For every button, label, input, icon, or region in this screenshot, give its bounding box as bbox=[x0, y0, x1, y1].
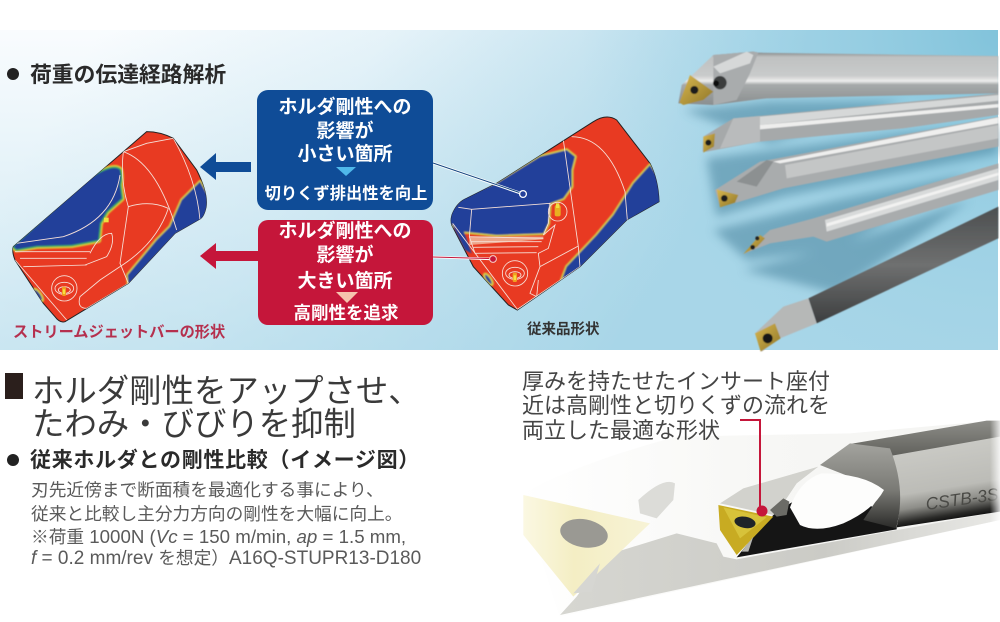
subheading: rigidity comparison: 従来ホルダとの剛性比較（イメージ図） bbox=[30, 448, 420, 472]
cutaway illustration of holder: CSTB-3S bbox=[924, 484, 1000, 514]
panel: low influence area: 影響が bbox=[316, 119, 374, 142]
heading: raise holder rigidity: たわみ・びびりを抑制 bbox=[32, 406, 356, 442]
callout leader: red to high influence area bbox=[433, 256, 496, 262]
heat map: conventional shape bbox=[443, 117, 663, 310]
text block: insert seat description: 近は高剛性と切りくずの流れを bbox=[522, 393, 830, 418]
body text: f = 0.2 mm/rev を想定）A16Q-STUPR13-D180 bbox=[31, 548, 421, 569]
panel: low influence area: ホルダ剛性への bbox=[278, 95, 412, 118]
panel: high influence area: 高剛性を追求 bbox=[294, 303, 399, 323]
panel: low influence area: 切りくず排出性を向上 bbox=[265, 184, 427, 203]
text block: insert seat description: 厚みを持たせたインサート座付 bbox=[522, 369, 830, 394]
panel: low influence area bbox=[257, 90, 433, 210]
panel: low influence area: 小さい箇所 bbox=[297, 143, 393, 165]
arrow: red pointing left bbox=[200, 243, 258, 269]
tool 4 bbox=[743, 163, 998, 254]
tool 5 bbox=[808, 207, 998, 323]
caption: conventional shape: 従来品形状 bbox=[527, 320, 600, 338]
cutaway illustration of holder bbox=[520, 420, 1000, 617]
panel: high influence area: 大きい箇所 bbox=[297, 270, 393, 292]
panel: high influence area: 影響が bbox=[316, 243, 374, 266]
tool 1 bbox=[678, 52, 998, 105]
body text: 従来と比較し主分力方向の剛性を大幅に向上。 bbox=[31, 504, 402, 524]
panel: high influence area bbox=[258, 219, 433, 325]
body text: ※荷重 1000N (Vc = 150 m/min, ap = 1.5 mm, bbox=[31, 526, 406, 547]
tool 3 bbox=[715, 117, 998, 207]
body text bbox=[31, 480, 421, 569]
tool 2 bbox=[703, 93, 998, 152]
top background band bbox=[0, 30, 998, 350]
text block: insert seat description: 両立した最適な形状 bbox=[522, 418, 720, 443]
pointer: to insert seat bbox=[740, 420, 768, 516]
callout leader: blue to low influence area bbox=[433, 163, 526, 197]
heading marker bbox=[5, 373, 23, 399]
heading: raise holder rigidity: ホルダ剛性をアップさせ、 bbox=[32, 373, 421, 409]
body text: 刃先近傍まで断面積を最適化する事により、 bbox=[31, 480, 384, 500]
heat map: Stream Jet Bar shape bbox=[13, 132, 210, 322]
panel: high influence area: ホルダ剛性への bbox=[278, 219, 412, 242]
section title: load path analysis: 荷重の伝達経路解析 bbox=[30, 62, 226, 87]
text block: insert seat description bbox=[522, 369, 830, 443]
product photo: boring bars bbox=[678, 52, 998, 352]
heading: raise holder rigidity bbox=[32, 373, 421, 442]
arrow: blue pointing left bbox=[200, 153, 251, 180]
caption: Stream Jet Bar shape: ストリームジェットバーの形状 bbox=[13, 323, 225, 341]
